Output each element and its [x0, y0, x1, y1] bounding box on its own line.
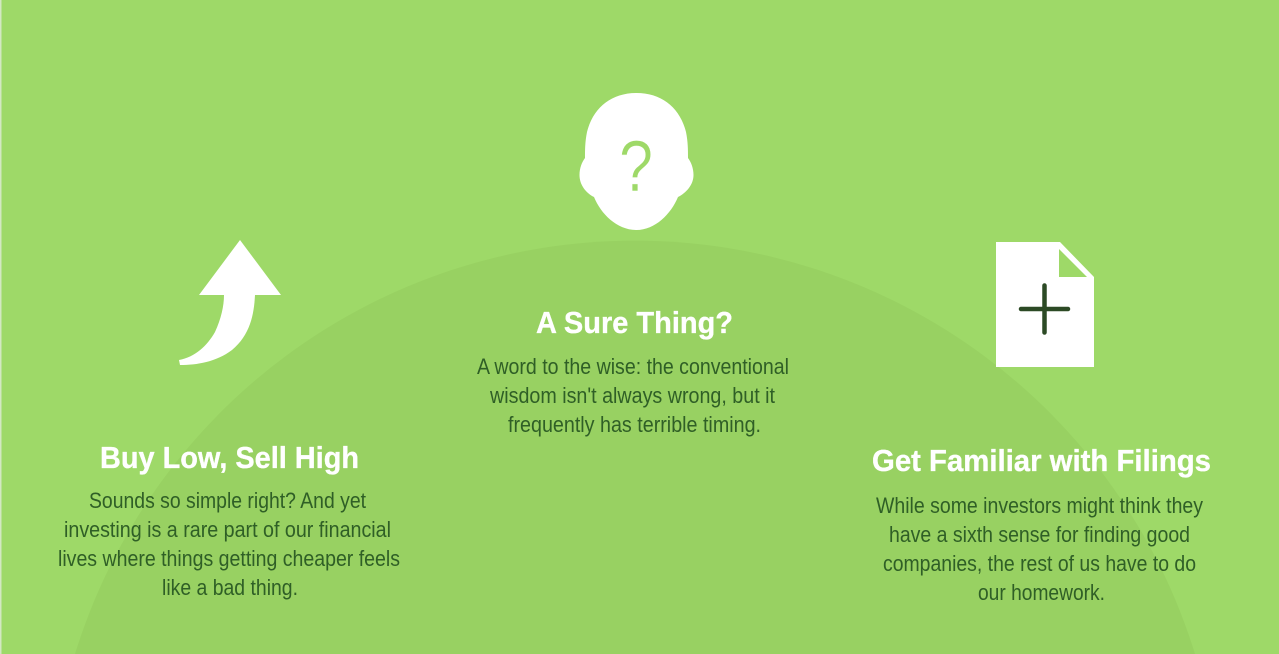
text block: buy low description [58, 488, 400, 600]
text block: buy low description: lives where things getting cheaper feels [58, 546, 400, 571]
text block: filings description: our homework. [978, 580, 1105, 605]
text block: filings description: While some investors might think they [876, 493, 1203, 518]
text block: a sure thing description [477, 354, 789, 437]
icon: document with plus [996, 242, 1094, 367]
icon: head with question mark [580, 93, 694, 230]
heading: get familiar with filings: Get Familiar with Filings [872, 443, 1211, 478]
text block: buy low description: like a bad thing. [162, 575, 298, 600]
text block: a sure thing description: wisdom isn't always wrong, but it [489, 383, 775, 408]
heading: buy low, sell high: Buy Low, Sell High [100, 440, 359, 475]
panel: get familiar with filings [872, 242, 1211, 605]
text block: buy low description: investing is a rare part of our financial [64, 517, 391, 542]
icon: head with question mark: ? [619, 127, 653, 207]
text block: filings description [876, 493, 1203, 605]
icon: curved up arrow [179, 240, 281, 365]
panel: buy low, sell high [58, 240, 400, 600]
panel: a sure thing [477, 93, 789, 437]
text block: a sure thing description: A word to the wise: the conventional [477, 354, 789, 379]
text block: a sure thing description: frequently has terrible timing. [508, 412, 761, 437]
text block: buy low description: Sounds so simple right? And yet [89, 488, 366, 513]
text block: filings description: have a sixth sense for finding good [889, 522, 1190, 547]
background arc [75, 241, 1195, 654]
heading: a sure thing: A Sure Thing? [536, 305, 733, 340]
text block: filings description: companies, the rest of us have to do [883, 551, 1196, 576]
